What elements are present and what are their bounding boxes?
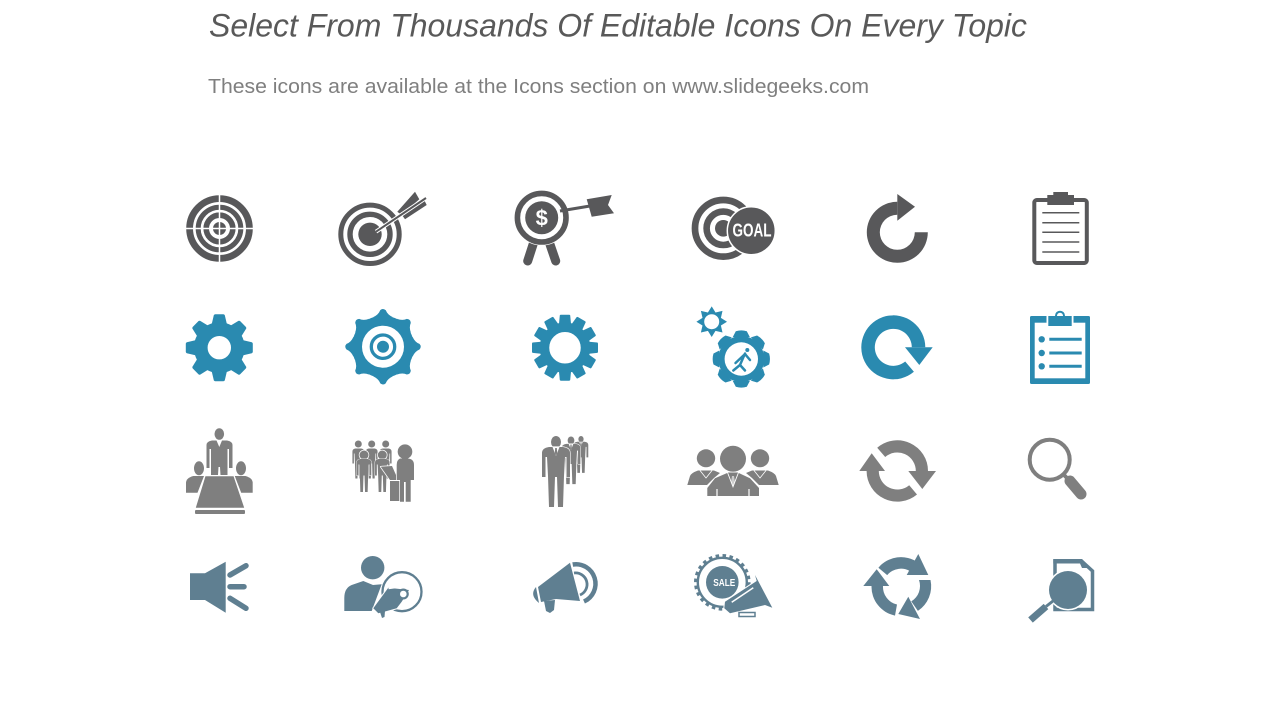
icon: goal target: GOAL [732,220,772,241]
icon: document with magnifier [1030,559,1092,620]
icon: clockwise arrow [867,194,928,263]
icon: two-arrow refresh [859,440,936,502]
row 4: slate marketing icons [190,554,1092,620]
icon: sale badge with megaphone [696,556,772,616]
icon: sale badge with megaphone: SALE [713,577,735,589]
row 1: dark grey target icons [185,192,1087,264]
icon: eight-tooth gear [186,314,253,381]
icon: three-arrow cycle [863,554,931,619]
icon: circular arrow [861,315,933,379]
icon: three business people [687,446,779,496]
icon: crosshair target [185,194,254,263]
subtitle: These icons are available at the Icons section on www.slidegeeks.com [208,75,869,98]
icon: gears with walking person [696,306,770,388]
icon: target with arrow [341,192,427,264]
icon: checklist clipboard [1030,312,1090,384]
icon: person with megaphone [344,556,422,618]
icon: twelve-tooth gear [532,315,598,381]
icon: loudspeaker [190,562,246,613]
icon: megaphone with sound waves [533,563,595,613]
icon: magnifying glass [1030,440,1081,494]
icon: line of businessmen [542,436,588,507]
icon: dollar target with dart: $ [536,206,548,230]
icon: clipboard with lines [1034,192,1087,263]
icon: dollar target with dart [517,193,614,261]
icon: boardroom meeting [186,428,253,514]
icon: goal target [695,200,775,257]
title: Select From Thousands Of Editable Icons On Every Topic [209,8,1027,44]
row 3: grey people icons [186,428,1081,514]
icon: gear with target [345,309,421,384]
row 2: blue gear icons [186,306,1090,388]
icon: presenter with team [352,440,414,502]
